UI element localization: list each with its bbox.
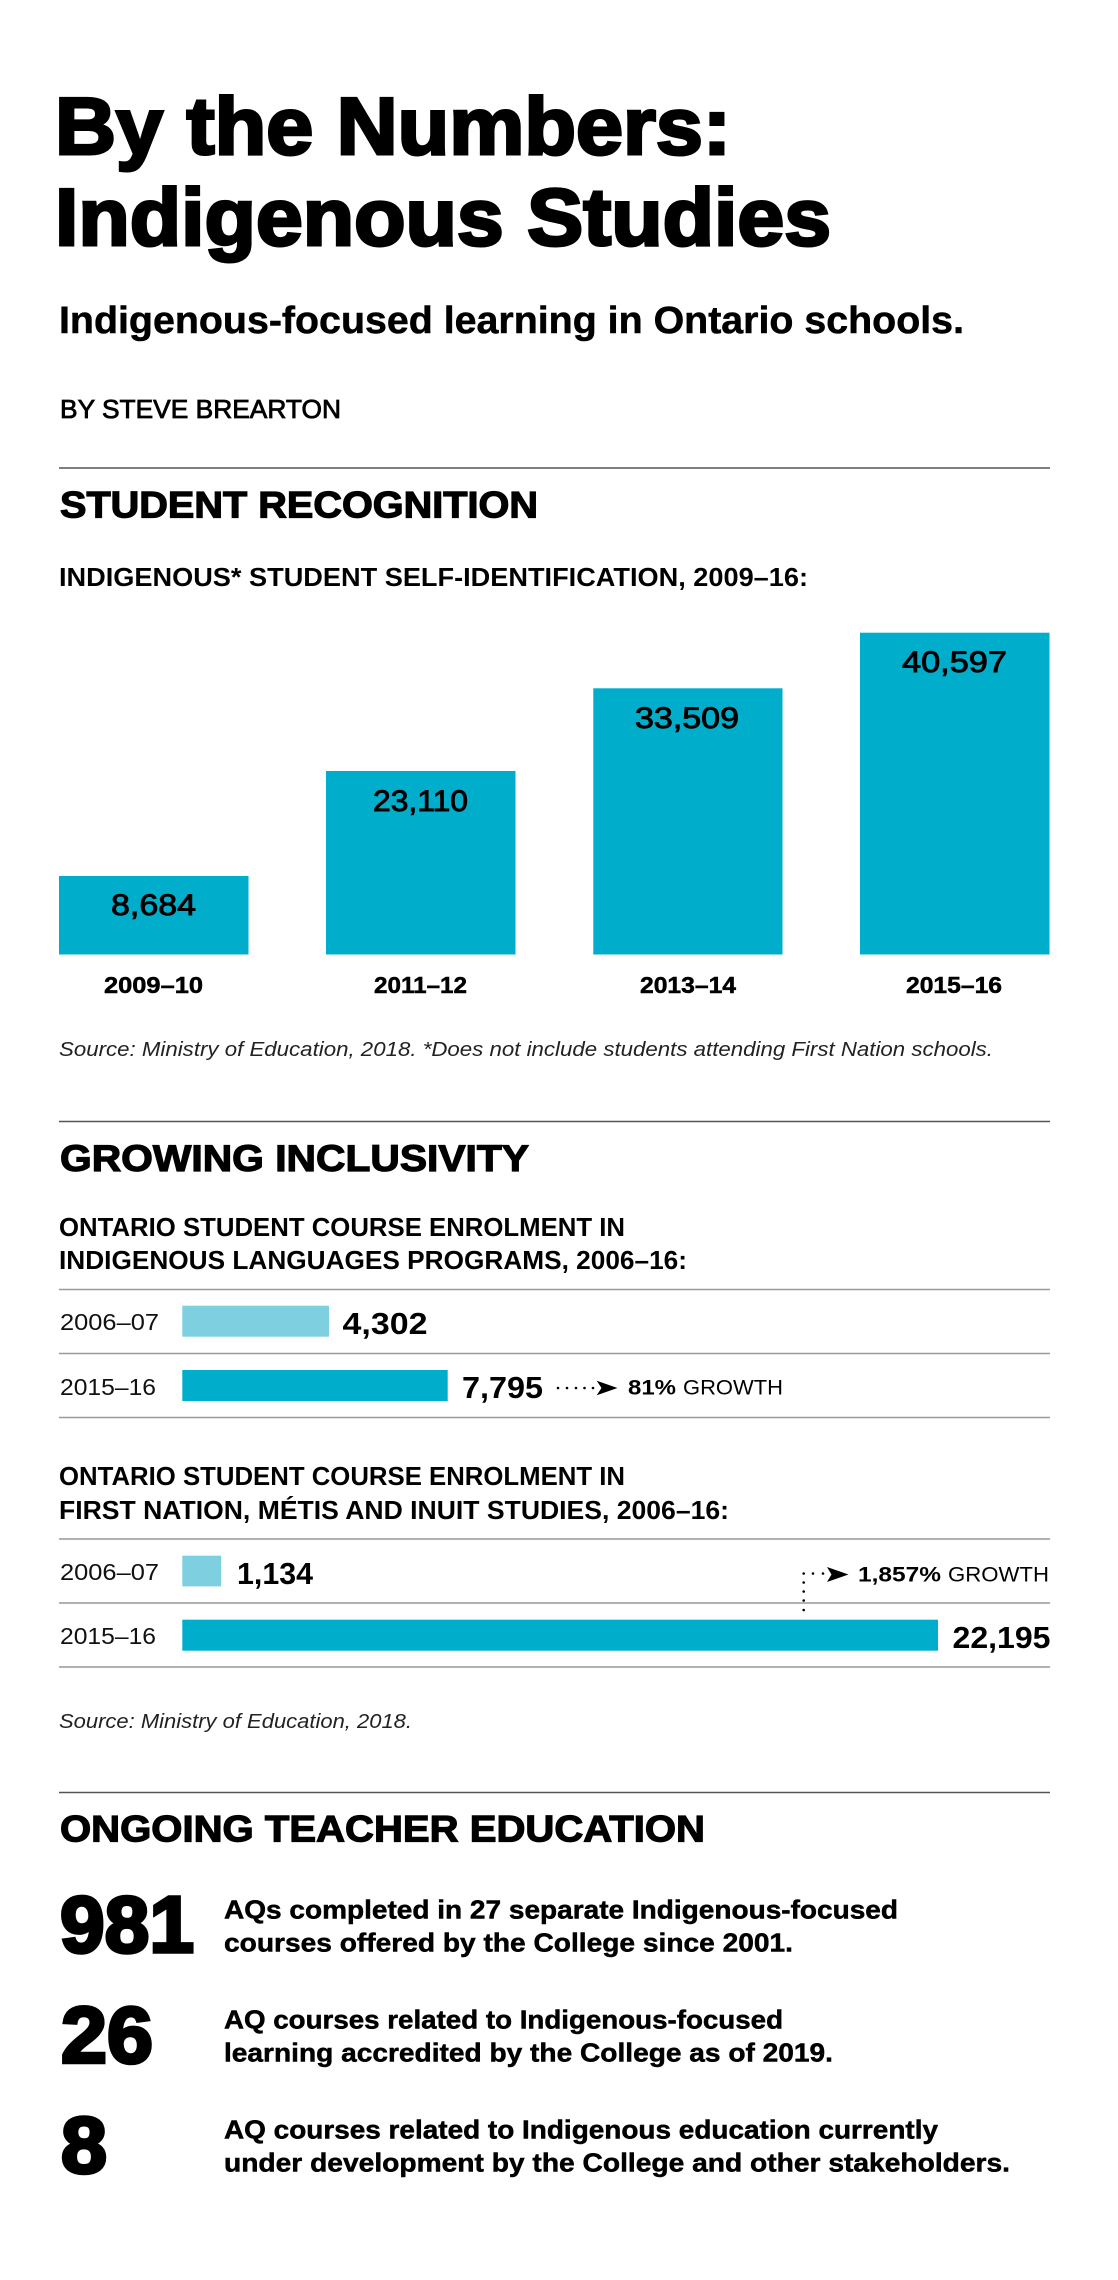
chart title: FNMI studies: FIRST NATION, MÉTIS AND INUIT STUDIES, 2006–16: (59, 1495, 729, 1525)
row 2006-07: 4,302 (342, 1306, 428, 1341)
chart title: languages programs: ONTARIO STUDENT COURSE ENROLMENT IN (59, 1212, 625, 1242)
chart title: FNMI studies: ONTARIO STUDENT COURSE ENROLMENT IN (59, 1461, 625, 1491)
bar 2013-14: 2013–14 (640, 972, 736, 998)
stat: 981: courses offered by the College since 2001. (224, 1928, 793, 1958)
arrow: 1,857% growth (802, 1567, 848, 1611)
bar 2015-16 (860, 633, 1050, 998)
panel: growing inclusivity (59, 1122, 1050, 1733)
bar 2011-12: 2011–12 (374, 972, 467, 998)
row 2015-16 (60, 1620, 1050, 1655)
stat: 8 (61, 2100, 1010, 2189)
callout: 81% growth (628, 1376, 783, 1400)
row 2015-16 (60, 1370, 543, 1405)
source note: Source: Ministry of Education, 2018. *Does not include students attending First Nation schools. (59, 1038, 993, 1061)
stat: 26: learning accredited by the College as of 2019. (224, 2038, 833, 2068)
stat: 8: AQ courses related to Indigenous education currently (224, 2114, 939, 2144)
stat: 981: 981 (60, 1880, 194, 1969)
title: Indigenous Studies (55, 173, 831, 263)
bar 2015-16: 2015–16 (906, 972, 1002, 998)
heading: growing inclusivity: GROWING INCLUSIVITY (60, 1138, 529, 1179)
row 2006-07 (60, 1306, 428, 1341)
stat: 981: AQs completed in 27 separate Indigenous-focused (224, 1894, 898, 1924)
bar chart: self-identification (59, 633, 1050, 998)
chart title: languages programs (59, 1212, 687, 1275)
callout: 1,857% growth (858, 1564, 1049, 1587)
panel: ongoing teacher education (59, 1792, 1050, 2189)
chart title: FNMI studies (59, 1461, 729, 1525)
callout: 1,857% growth: GROWTH (948, 1564, 1049, 1587)
row 2015-16: 2015–16 (60, 1623, 156, 1649)
source note: Source: Ministry of Education, 2018. (59, 1710, 412, 1733)
heading: ongoing teacher education: ONGOING TEACHER EDUCATION (60, 1808, 705, 1850)
bar 2011-12 (326, 771, 516, 998)
bar 2009-10 (59, 876, 248, 998)
stat: 26: AQ courses related to Indigenous-focused (224, 2004, 783, 2034)
stat: 8: under development by the College and other stakeholders. (224, 2148, 1010, 2178)
panel: student recognition (59, 468, 1050, 1061)
row 2006-07: 1,134 (237, 1556, 314, 1591)
byline: BY STEVE BREARTON (60, 394, 341, 424)
callout: 81% growth: 81% (628, 1376, 676, 1400)
subtitle: Indigenous-focused learning in Ontario schools. (59, 300, 964, 342)
arrow: 81% growth (557, 1381, 618, 1395)
stat: 981 (60, 1880, 898, 1969)
title: By the Numbers: (55, 82, 731, 172)
bar 2009-10: 8,684 (111, 889, 196, 922)
chart: first nation, metis and inuit studies (59, 1461, 1050, 1667)
row 2015-16: 7,795 (462, 1370, 543, 1405)
callout: 1,857% growth: 1,857% (858, 1564, 941, 1587)
stat: 8: 8 (61, 2100, 107, 2189)
chart: languages programs (59, 1212, 1050, 1418)
bar 2011-12: 23,110 (373, 785, 468, 818)
bar 2015-16: 40,597 (902, 646, 1007, 679)
bar 2013-14: 33,509 (635, 702, 739, 735)
bar 2013-14 (593, 688, 782, 998)
row 2015-16: 2015–16 (60, 1374, 156, 1400)
chart title: languages programs: INDIGENOUS LANGUAGES PROGRAMS, 2006–16: (59, 1245, 687, 1275)
row 2006-07 (60, 1556, 314, 1591)
stat: 26 (61, 1990, 833, 2079)
callout: 81% growth: GROWTH (683, 1376, 783, 1400)
row 2015-16: 22,195 (952, 1620, 1050, 1655)
stat: 26: 26 (61, 1990, 153, 2079)
row 2006-07: 2006–07 (60, 1559, 159, 1585)
row 2006-07: 2006–07 (60, 1309, 159, 1335)
chart title: self-identification: INDIGENOUS* STUDENT SELF-IDENTIFICATION, 2009–16: (59, 562, 808, 592)
heading: student recognition: STUDENT RECOGNITION (60, 484, 538, 526)
bar 2009-10: 2009–10 (104, 972, 203, 998)
title (55, 82, 831, 263)
